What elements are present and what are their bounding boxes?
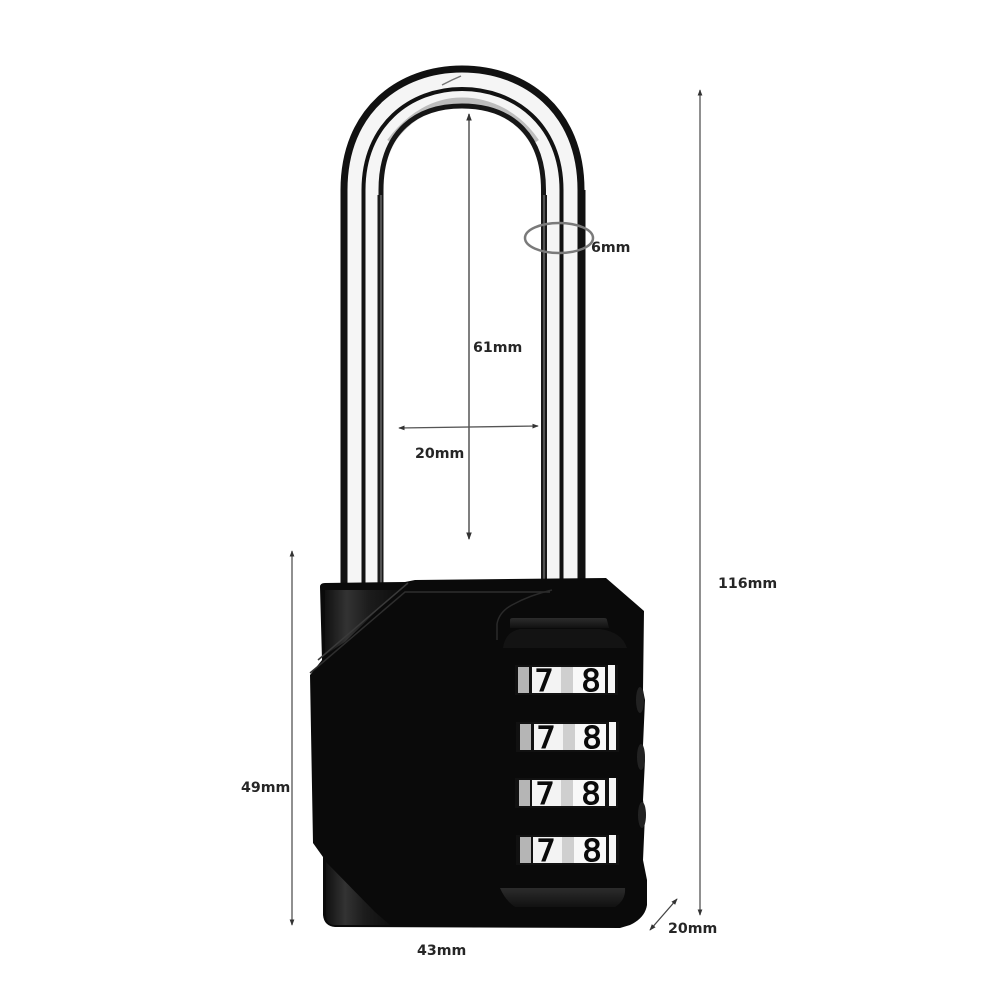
- arrow: 20mm depth: [650, 899, 677, 930]
- front plate edge: [310, 592, 550, 673]
- label: 20mm width: 20mm: [415, 446, 464, 462]
- icon: 6mm diameter ring: [525, 223, 593, 253]
- label: 116mm: 116mm: [718, 576, 777, 592]
- right side dial bumps: [636, 687, 646, 828]
- bottom thumb ridge: [500, 888, 625, 907]
- icon: padlock body: [310, 578, 647, 928]
- top thumb ridge: [497, 590, 552, 640]
- arrow: 49mm body height: [291, 551, 293, 925]
- dial row 4: 8: [582, 834, 602, 869]
- arrow: 61mm shackle clearance: [468, 114, 470, 539]
- dial row 3: 7: [535, 777, 555, 812]
- dial row 3: 8: [581, 777, 601, 812]
- left side sheen: [325, 590, 398, 655]
- lock body back: [310, 578, 647, 928]
- arrow: 20mm shackle width: [399, 426, 538, 428]
- label: 6mm: 6mm: [591, 240, 630, 256]
- label: 61mm: 61mm: [473, 340, 522, 356]
- label: 43mm: 43mm: [417, 943, 466, 959]
- dial row 1: 8: [581, 664, 601, 699]
- dial row 1: 7: [534, 664, 554, 699]
- arrow: 116mm total height: [699, 90, 701, 915]
- dial row 2: 8: [582, 721, 602, 756]
- icon: padlock shackle: [344, 69, 582, 590]
- dial row 2: [516, 721, 619, 756]
- dial row 4: 7: [536, 834, 556, 869]
- dial row 4: [516, 834, 619, 869]
- label: 49mm: 49mm: [241, 780, 290, 796]
- dial row 1: [515, 664, 618, 699]
- dial row 3: [515, 777, 618, 812]
- dial row 2: 7: [536, 721, 556, 756]
- label: 20mm depth: 20mm: [668, 921, 717, 937]
